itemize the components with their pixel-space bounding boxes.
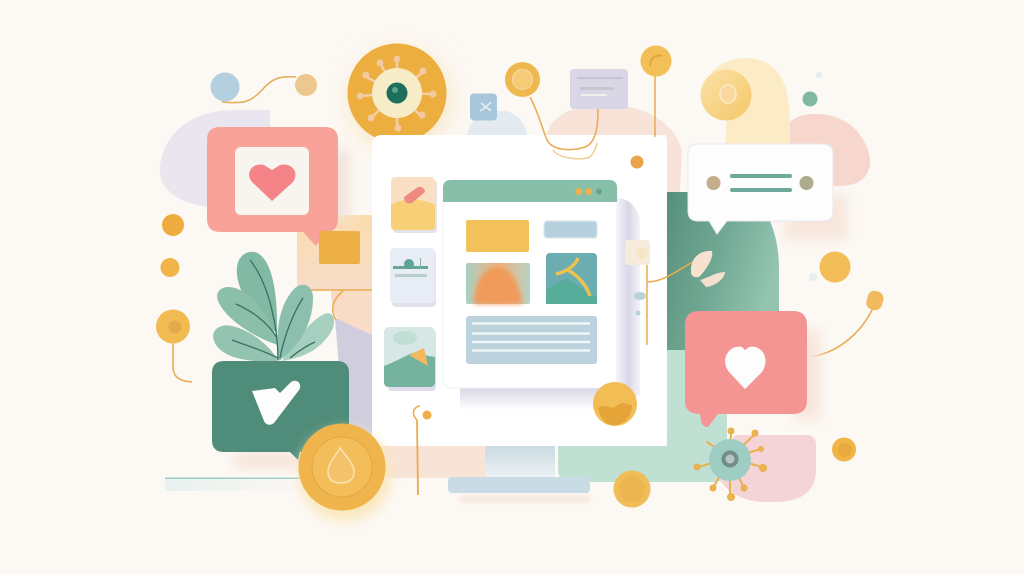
icon: sparkle [816, 72, 822, 78]
speech bubble: green check [212, 361, 349, 468]
small coin on screen [630, 156, 644, 168]
icon: small coin upper left [162, 214, 184, 236]
yellow block [466, 220, 529, 252]
icon: coin bottom right [832, 438, 856, 462]
icon: blue dot with connector [210, 72, 317, 103]
monitor stand [448, 446, 590, 503]
icon: coin bottom centre [614, 470, 650, 508]
icon: coin top [505, 62, 540, 97]
thumbnail: yellow card [391, 177, 437, 233]
speech bubble: pink heart [207, 127, 338, 246]
icon: small coin lower left [160, 258, 180, 277]
window side shadow [617, 198, 640, 400]
thumbnail: list card [390, 248, 436, 307]
thumbnail: mountain card [384, 327, 436, 391]
background blobs [160, 58, 870, 502]
icon: gold pin [413, 406, 432, 420]
connector knot on monitor [625, 240, 725, 287]
bubble shadow left [320, 150, 350, 220]
icon: pale yellow circle [700, 70, 752, 120]
icon: gold drop coin [298, 424, 391, 521]
window bottom shadow [460, 388, 618, 410]
icon: teal dot [802, 92, 818, 106]
red bubble shadow [795, 330, 820, 420]
icon: teal virus [694, 428, 766, 500]
speech bubble: white [688, 144, 833, 234]
speech bubble: red heart [685, 311, 807, 427]
icon: coin with tail [156, 310, 190, 344]
side dots [634, 292, 646, 316]
white bubble shadow [785, 195, 847, 240]
monitor screen [372, 135, 667, 446]
monitor peach shadow [372, 446, 485, 478]
sunset image [466, 263, 530, 304]
plant [213, 252, 334, 361]
gold connectors [173, 76, 873, 495]
icon: blue square [470, 94, 497, 120]
teal image [546, 253, 597, 304]
text panel [466, 316, 597, 364]
icon: gold virus badge [348, 44, 450, 150]
window header [443, 180, 617, 202]
icon: coin top right [640, 46, 672, 76]
bottom left line [165, 478, 305, 491]
icon: coin right [809, 252, 850, 282]
icon: coin on monitor edge [593, 382, 637, 426]
blue block [544, 221, 597, 238]
card: lavender note [570, 69, 628, 109]
app window [443, 180, 617, 388]
window controls [576, 188, 602, 195]
icon: orange square [319, 231, 360, 264]
icon: knob [865, 289, 885, 312]
